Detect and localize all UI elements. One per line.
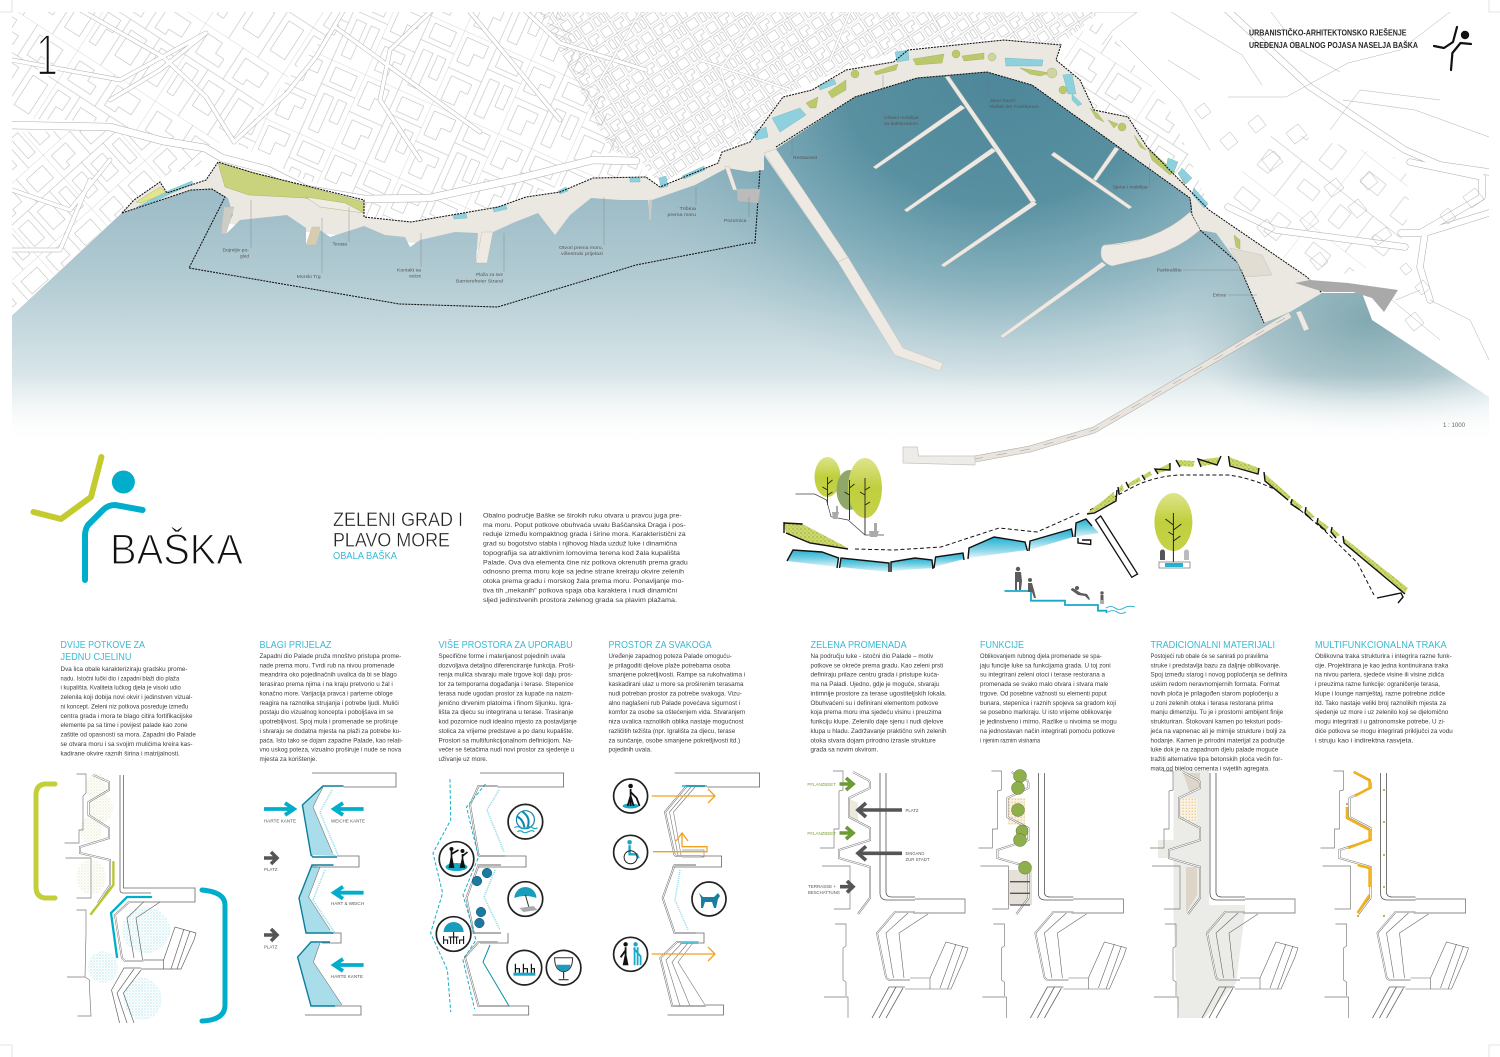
diagram 1: two horseshoes xyxy=(36,773,225,1023)
column 7: Tradicionalni materijali: jeća na vapnenac ali je mirnije strukture i bolji za xyxy=(1149,728,1286,735)
column 3: Više prostora za uporabu: VIŠE PROSTORA ZA UPORABU xyxy=(438,638,573,651)
column 2: Blagi prijelaz: upotrebljivost. Spoj mula i promenade se proširuje xyxy=(260,719,398,726)
diagram 2: hard and soft edge: HART & WEICH xyxy=(331,901,364,906)
tree with bench xyxy=(1154,493,1192,568)
column 7: Tradicionalni materijali xyxy=(1149,639,1288,772)
column 2: Blagi prijelaz: postaju dio vizualnog koncepta i poboljšava im se xyxy=(260,709,394,716)
column 1: Dvije potkove za jednu cjelinu: centra grada i mora te blago citira fortifikacijske xyxy=(60,713,193,720)
diagram 5: green promenade: EINGANG xyxy=(906,851,925,856)
column 1: Dvije potkove za jednu cjelinu: Dva lica obale karakteriziraju gradsku prome- xyxy=(60,666,188,673)
column 5: Zelena promenada: ZELENA PROMENADA xyxy=(810,639,907,651)
icon: people xyxy=(439,842,474,876)
column 1: Dvije potkove za jednu cjelinu: JEDNU CJELINU xyxy=(60,651,132,663)
column 4: Prostor za svakoga: različitih težišta (npr. Igrališta za djecu, terase xyxy=(608,728,736,735)
column 5: Zelena promenada: grada sa novim okvirom. xyxy=(810,747,878,754)
column 7: Tradicionalni materijali: uskim redom neravnomjernih formata. Format xyxy=(1150,681,1280,688)
column 3: Više prostora za uporabu: terasa nude ugodan prostor za kupače na naizm- xyxy=(438,690,574,698)
column 1: Dvije potkove za jednu cjelinu: zelenila koji dobija novi okvir i jedinstven vizual- xyxy=(60,694,192,701)
grey arrows xyxy=(264,852,277,941)
urban fabric xyxy=(12,12,1410,315)
map labels: Tribina xyxy=(680,206,697,211)
column 5: Zelena promenada: intimnije prostore za terase ugostiteljskih lokala. xyxy=(810,690,947,698)
diagram 5: green promenade: BESCHATTUNG xyxy=(808,890,840,895)
column 6: Funkcije: bunara, stepenica i raznih spojeva sa gradom koji xyxy=(980,700,1116,707)
green arrows xyxy=(840,778,853,839)
column 4: Prostor za svakoga: niza uvalica raznolikih oblika nastaje mogućnost xyxy=(608,719,744,726)
column 1: Dvije potkove za jednu cjelinu: ni koncept. Zeleni niz potkova posreduje između xyxy=(60,704,189,710)
intro text xyxy=(483,512,688,604)
icon: table and umbrella xyxy=(436,917,471,951)
column 8: Multifunkcionalna traka: diće potkova se mogu integrirati priključci za vodu xyxy=(1315,728,1453,735)
column 7: Tradicionalni materijali: strukturiran. Štokovani kamen po teksturi pods- xyxy=(1150,717,1282,726)
header title xyxy=(1249,26,1418,50)
icon: sun loungers xyxy=(507,950,542,985)
column 7: Tradicionalni materijali: struke i predstavlja bazu za daljnje oblikovanje. xyxy=(1150,662,1281,669)
column 2: Blagi prijelaz: reagira na raznolika strujanja i potrebe ljudi. Mulići xyxy=(260,700,399,707)
sheet number: 1 xyxy=(36,23,58,88)
column 4: Prostor za svakoga: je prilagoditi djelove plaže potrebama osoba xyxy=(608,662,731,669)
column 1: Dvije potkove za jednu cjelinu: se otvara moru i sa svojim mulićima kreira kas- xyxy=(60,741,192,748)
diagram 2: hard and soft edge: PLATZ xyxy=(264,867,278,872)
icon: guide dog xyxy=(692,882,726,916)
column 5: Zelena promenada: potkove se okreće prema gradu. Kao zeleni prsti xyxy=(810,662,943,669)
site plan map xyxy=(5,8,1489,445)
map labels: Plaža za sve xyxy=(476,272,503,277)
intro text: grad su bogotstvo stabla i njihovog hlada uzduž luke i dinamična xyxy=(483,541,678,548)
column 1: Dvije potkove za jednu cjelinu: nadu. Istočni lučki dio i zapadni blaži dio plaža xyxy=(60,675,180,682)
map labels: višestruki prijelazi xyxy=(561,251,603,256)
column 7: Tradicionalni materijali: TRADICIONALNI MATERIJALI xyxy=(1150,639,1275,651)
column 8: Multifunkcionalna traka: Oblikovna traka strukturira i integrira razne funk- xyxy=(1315,653,1452,660)
map labels: sa dalekovidom xyxy=(884,121,918,126)
column 1: Dvije potkove za jednu cjelinu: kadirane okvire raznih širina i matrijalnosti. xyxy=(60,750,180,757)
green bracket xyxy=(36,784,55,898)
section diagram: horseshoes along the shore xyxy=(784,456,1408,614)
map labels: Entree xyxy=(1213,292,1227,298)
map labels: prema moru xyxy=(668,212,697,217)
column 4: Prostor za svakoga: Uređenje zapadnog poteza Palade omoguću- xyxy=(608,653,732,660)
column 2: Blagi prijelaz: konačno more. Varijacija pravca i parterne obloge xyxy=(260,690,393,698)
intro text: reduje između kompaktnog grada i širine mora. Karakteristični za xyxy=(483,531,686,538)
small umbrellas xyxy=(472,868,492,928)
column 7: Tradicionalni materijali: mata od bijelog cementa i svjetlih agregata. xyxy=(1150,765,1270,772)
green islands xyxy=(136,50,1240,249)
column 5: Zelena promenada: Na području luke - istočni dio Palade – motiv xyxy=(810,653,934,660)
column 7: Tradicionalni materijali: Spoj između starog i novog popločenja se definira xyxy=(1150,672,1288,679)
column 3: Više prostora za uporabu: večer se šetačima nudi novi prostor za sjedenje u xyxy=(438,747,575,754)
icon: beach ball xyxy=(508,804,543,839)
diagram 5: green promenade xyxy=(807,771,968,1018)
project boundary xyxy=(122,40,1322,323)
column 5: Zelena promenada: ma na Paladi. Ujedno, gdje je moguće, stvaraju xyxy=(810,681,940,688)
intro text: topografija sa atraktivnim lomovima terena kod žala kupališta xyxy=(483,550,681,557)
blue bracket xyxy=(202,890,225,1021)
column 8: Multifunkcionalna traka: mogu integrirati i u gatronomske potrebe. U zi- xyxy=(1315,719,1445,726)
column 3: Više prostora za uporabu: kod pozornice nudi idealno mjesto za postavljanje xyxy=(438,719,577,726)
column 4: Prostor za svakoga xyxy=(608,639,745,754)
map labels: Kontakt sa xyxy=(397,268,421,272)
icon: small black logo xyxy=(1434,27,1471,70)
map labels: Otvori prema moru, xyxy=(559,245,603,250)
diagram 4: space for everyone xyxy=(614,773,760,1015)
column 6: Funkcije: i njenim raznim visinama xyxy=(980,737,1040,744)
main title xyxy=(333,509,463,562)
main title: PLAVO MORE xyxy=(333,530,450,552)
column 6: Funkcije: na jednostavan način integrirati pomoću potkove xyxy=(980,728,1115,735)
column 4: Prostor za svakoga: kaskadirani ulaz u more sa proširenim terasama xyxy=(608,681,744,688)
diagram 2: hard and soft edge: HARTE KANTE xyxy=(331,974,363,979)
column 2: Blagi prijelaz: vno uskog poteza, vizualno proširuje i nude se nova xyxy=(260,747,402,754)
column 6: Funkcije: se posebno markiraju. U isto vrijeme oblikovanje xyxy=(980,709,1112,716)
column 1: Dvije potkove za jednu cjelinu: DVIJE POTKOVE ZA xyxy=(60,639,145,651)
column 4: Prostor za svakoga: alno naglašeni rub Palade povećava sigurnost i xyxy=(608,700,740,707)
header title: UREĐENJA OBALNOG POJASA NASELJA BAŠKA xyxy=(1249,39,1418,50)
diagram 2: hard and soft edge xyxy=(264,773,396,1015)
column 6: Funkcije xyxy=(979,639,1117,744)
column 6: Funkcije: FUNKCIJE xyxy=(980,639,1024,651)
column 3: Više prostora za uporabu: renja mulića stvaraju male trgove koji daju pros- xyxy=(438,672,573,679)
map labels: vodom xyxy=(409,274,421,278)
column 3: Više prostora za uporabu: Specifične forme i materijanost pojedinih uvala xyxy=(438,653,566,660)
column 8: Multifunkcionalna traka: i preuzima razne funkcije: ograničenje terasa, xyxy=(1315,681,1440,688)
column 5: Zelena promenada: funkciju klupe. Zelenilo daje sjenu i nudi djelove xyxy=(810,719,944,726)
diagram 5: green promenade: PFLANZBEET xyxy=(807,782,836,787)
column 6: Funkcije: Oblikovanjem rubnog djela promenade se spa- xyxy=(980,653,1102,660)
logo: Baška: BAŠKA xyxy=(110,526,243,574)
pier xyxy=(1096,516,1138,577)
map labels: Sjene i mobilijar xyxy=(1113,184,1148,190)
diagram 5: green promenade: TERRASSE + xyxy=(808,884,836,889)
orange arrows xyxy=(652,789,715,961)
column 2: Blagi prijelaz: BLAGI PRIJELAZ xyxy=(260,639,332,651)
column 3: Više prostora za uporabu: uživanje uz more. xyxy=(438,756,488,763)
map labels: Barrierefreier Strand xyxy=(456,278,503,284)
column 3: Više prostora za uporabu: tor za temporarna događanja i terase. Stepenice xyxy=(438,681,574,688)
dashed promenade line xyxy=(855,475,1374,595)
column 1: Dvije potkove za jednu cjelinu xyxy=(60,639,196,757)
main title: OBALA BAŠKA xyxy=(333,549,397,562)
column 5: Zelena promenada: klupa u hladu. Zadržavanje praktično svih zelenih xyxy=(810,728,947,735)
column 5: Zelena promenada: otoka stvara dojam prirodno izrasle strukture xyxy=(810,737,936,744)
blue pieces xyxy=(787,519,1099,572)
column 1: Dvije potkove za jednu cjelinu: elemente pa sa time i povijest palade kao zone xyxy=(60,722,188,729)
map labels: Urbani mobilijar xyxy=(884,115,920,120)
map labels: Parkiralište xyxy=(1157,268,1182,272)
column 8: Multifunkcionalna traka: i struju kao i indirektna rasvjeta. xyxy=(1315,737,1414,744)
column 8: Multifunkcionalna traka: sjedenje uz more i uz zelenilo koji se djelomično xyxy=(1315,709,1449,716)
trees xyxy=(1012,770,1032,874)
dashed blue lines xyxy=(431,779,486,1012)
map labels: Pozornica xyxy=(724,218,747,223)
map labels: „Meer Raum" xyxy=(989,98,1017,103)
map labels: gled xyxy=(240,254,249,258)
column 5: Zelena promenada: Obuhvaćeni su i definirani elementom potkove xyxy=(810,700,939,707)
column 2: Blagi prijelaz: mjesta za korištenje. xyxy=(260,756,317,763)
column 8: Multifunkcionalna traka: klupe i lounge namještaj, razne potrebne zidiće xyxy=(1315,690,1445,698)
diagram 8: multifunctional strip xyxy=(1320,771,1468,1018)
column 3: Više prostora za uporabu xyxy=(437,638,577,763)
blue edge line xyxy=(111,897,151,957)
column 3: Više prostora za uporabu: lišta za djecu su integrirana u terase. Trasiranje xyxy=(438,709,574,716)
column 2: Blagi prijelaz: i stvaraju se dodatna mjesta na plaži za potrebe ku- xyxy=(260,728,401,735)
column 2: Blagi prijelaz: meandrira oko pojedinačnih uvalica da bi se blago xyxy=(260,672,397,679)
diagram 2: hard and soft edge: WEICHE KANTE xyxy=(331,818,365,824)
icon: beach umbrella xyxy=(508,882,543,916)
diagram 5: green promenade: ZUR STADT xyxy=(906,857,930,862)
column 8: Multifunkcionalna traka: itd. Tako nastaje veliki broj raznolikih mjesta za xyxy=(1315,700,1446,707)
column 1: Dvije potkove za jednu cjelinu: i kupališta. Kvaliteta lučkog djela je visoki udio xyxy=(60,685,181,692)
column 5: Zelena promenada: definiraju prilaze centru grada i pristupe kuća- xyxy=(810,672,939,679)
sea xyxy=(12,60,1489,445)
column 2: Blagi prijelaz: Zapadni dio Palade pruža mnoštvo pristupa prome- xyxy=(260,653,401,660)
main title: ZELENI GRAD I xyxy=(333,509,463,531)
column 4: Prostor za svakoga: pojedinih uvala. xyxy=(608,747,652,754)
green pieces xyxy=(784,457,1408,593)
map labels: Terasa xyxy=(332,242,347,246)
column 4: Prostor za svakoga: smanjene pokretljivosti. Rampe sa rukohvatima i xyxy=(608,672,745,679)
column 3: Više prostora za uporabu: jenično drvenim platoima i finom šljunku. Igra- xyxy=(437,700,573,707)
intro text: sljed jedinstvenih prostora zelenog grada sa plavim plažama. xyxy=(483,597,677,604)
column 7: Tradicionalni materijali: hodanje. Kamen je prirodni materijal za područje xyxy=(1150,737,1285,744)
column 2: Blagi prijelaz: paća. Isto tako se dojam zapadne Palade, kao relati- xyxy=(260,737,403,744)
column 3: Više prostora za uporabu: dozvoljava detaljno diferenciranje funkcija. Proši- xyxy=(438,662,575,669)
diagram 5: green promenade: PLATZ xyxy=(906,808,919,813)
column 6: Funkcije: su integrirani zeleni otoci i terase restorana a xyxy=(980,672,1105,679)
column 6: Funkcije: promenada se svako malo otvara i stvara male xyxy=(980,681,1109,688)
intro text: Palade. Ova dva elementa čine niz potkova okrenutih prema gradu xyxy=(483,559,688,566)
column 8: Multifunkcionalna traka: na nivou partera, sjedeće visine ili visine zidića xyxy=(1315,672,1444,679)
trees on the slope xyxy=(796,457,884,537)
column 2: Blagi prijelaz: terasirao prema njima i na kraju pretvorio u žal i xyxy=(260,681,393,688)
diagram 5: green promenade: PFLANZBEET xyxy=(807,831,836,836)
intro text: tiva tih „mekanih" potkova spaja oba karaktera i nudi dinamični xyxy=(483,588,677,594)
promenade xyxy=(122,40,1322,330)
diagram 7: traditional materials xyxy=(1150,771,1298,1018)
column 6: Funkcije: trgove. Od posebne važnosti su elementi poput xyxy=(980,690,1107,698)
column 3: Više prostora za uporabu: Prostori sa multifunkcijonalnom definicijom. Na- xyxy=(438,737,573,744)
map labels: Morski Trg xyxy=(297,274,321,279)
column 2: Blagi prijelaz: nade prema moru. Tvrdi rub na nivou promenade xyxy=(260,662,395,669)
column 8: Multifunkcionalna traka: MULTIFUNKCIONALNA TRAKA xyxy=(1315,639,1447,651)
column 5: Zelena promenada xyxy=(810,639,947,754)
column 4: Prostor za svakoga: nudi potreban prostor za potrebe svakoga. Vizu- xyxy=(608,690,742,698)
header title: URBANISTIČKO-ARHITEKTONSKO RJEŠENJE xyxy=(1249,26,1407,38)
terrace units xyxy=(137,50,1208,219)
road bridge xyxy=(1295,280,1398,312)
column 8: Multifunkcionalna traka xyxy=(1315,639,1453,744)
icon: wine glass xyxy=(546,950,581,985)
column 7: Tradicionalni materijali: Postojeći rub obale će se sanirati po pravilima xyxy=(1150,653,1269,660)
column 5: Zelena promenada: koja prema moru ima sjedeću visinu i preuzima xyxy=(810,709,942,716)
green edge line xyxy=(91,862,113,914)
column 7: Tradicionalni materijali: tražiti alternative tipa betonskih ploča većih for- xyxy=(1150,756,1282,763)
column 3: Više prostora za uporabu: stolica za vrijeme predstave a po danu kupalište. xyxy=(438,728,574,735)
diagram 6: functions xyxy=(978,770,1126,1018)
parking lot xyxy=(1230,248,1272,277)
column 8: Multifunkcionalna traka: cije. Projektirana je kao jedna kontinuirana traka xyxy=(1315,662,1449,669)
blue arrows xyxy=(264,803,364,971)
scale: 1 : 1000 xyxy=(1443,423,1466,429)
column 6: Funkcije: je jedinstveno i mirno. Razlike u nivoima se mogu xyxy=(979,719,1117,726)
map labels xyxy=(222,98,1227,298)
lighting points xyxy=(1346,789,1385,917)
icon: elderly couple xyxy=(614,937,648,971)
column 4: Prostor za svakoga: komfor za osobe sa oštećenjem vida. Stvaranjem xyxy=(608,709,745,716)
column 7: Tradicionalni materijali: novih ploča je prilagođen starom popločenju a xyxy=(1150,690,1279,698)
intro text: otoka prema gradu i morskog žala prema moru. Ponavljanje mo- xyxy=(483,578,684,585)
intro text: odnosno prema moru koje sa jedne strane kreiraju okvire zelenih xyxy=(483,569,685,576)
column 7: Tradicionalni materijali: u zoni zelenih otoka i terasa restorana prima xyxy=(1150,700,1274,707)
column 7: Tradicionalni materijali: luke dok je na zapadnom djelu palade moguće xyxy=(1150,747,1279,754)
leader lines xyxy=(251,75,1257,295)
map labels: Restaurant xyxy=(793,155,818,160)
diagram 3: more space for use xyxy=(431,773,581,1015)
long breakwater xyxy=(903,315,1290,465)
column 2: Blagi prijelaz xyxy=(260,639,403,763)
diagram 2: hard and soft edge: HARTE KANTE xyxy=(264,818,296,824)
logo: Baška xyxy=(34,457,243,580)
stair section with figures xyxy=(1004,567,1135,614)
yellow strip xyxy=(1347,772,1370,913)
column 4: Prostor za svakoga: PROSTOR ZA SVAKOGA xyxy=(608,639,712,651)
icon: visually impaired person xyxy=(614,779,648,813)
intro text: Obalno područje Baške se širokih ruku otvara u pravcu juga pre- xyxy=(483,512,682,520)
intro text: ma moru. Poput potkove obuhvaća uvalu Baščanska Draga i pos- xyxy=(483,522,686,529)
diagram 2: hard and soft edge: PLATZ xyxy=(264,944,278,950)
grey arrows xyxy=(840,803,902,892)
column 1: Dvije potkove za jednu cjelinu: zaštite od opasnosti sa mora. Zapadni dio Palade xyxy=(60,732,196,739)
column 6: Funkcije: jaju funcije luke sa funkcijama grada. U toj zoni xyxy=(979,662,1111,669)
main roads xyxy=(5,8,1489,360)
map labels: Vielfalt der Funktionen xyxy=(989,104,1039,109)
column 4: Prostor za svakoga: za sunčanje, osobe smanjene pokretljivosti itd.) xyxy=(608,737,740,744)
map labels: Dojmljiv po- xyxy=(222,248,250,252)
column 7: Tradicionalni materijali: manju dimenziju. Tu je i prostorni ambijent finije xyxy=(1150,709,1284,716)
icon: wheelchair xyxy=(614,835,648,869)
harbour piers xyxy=(221,76,1309,371)
